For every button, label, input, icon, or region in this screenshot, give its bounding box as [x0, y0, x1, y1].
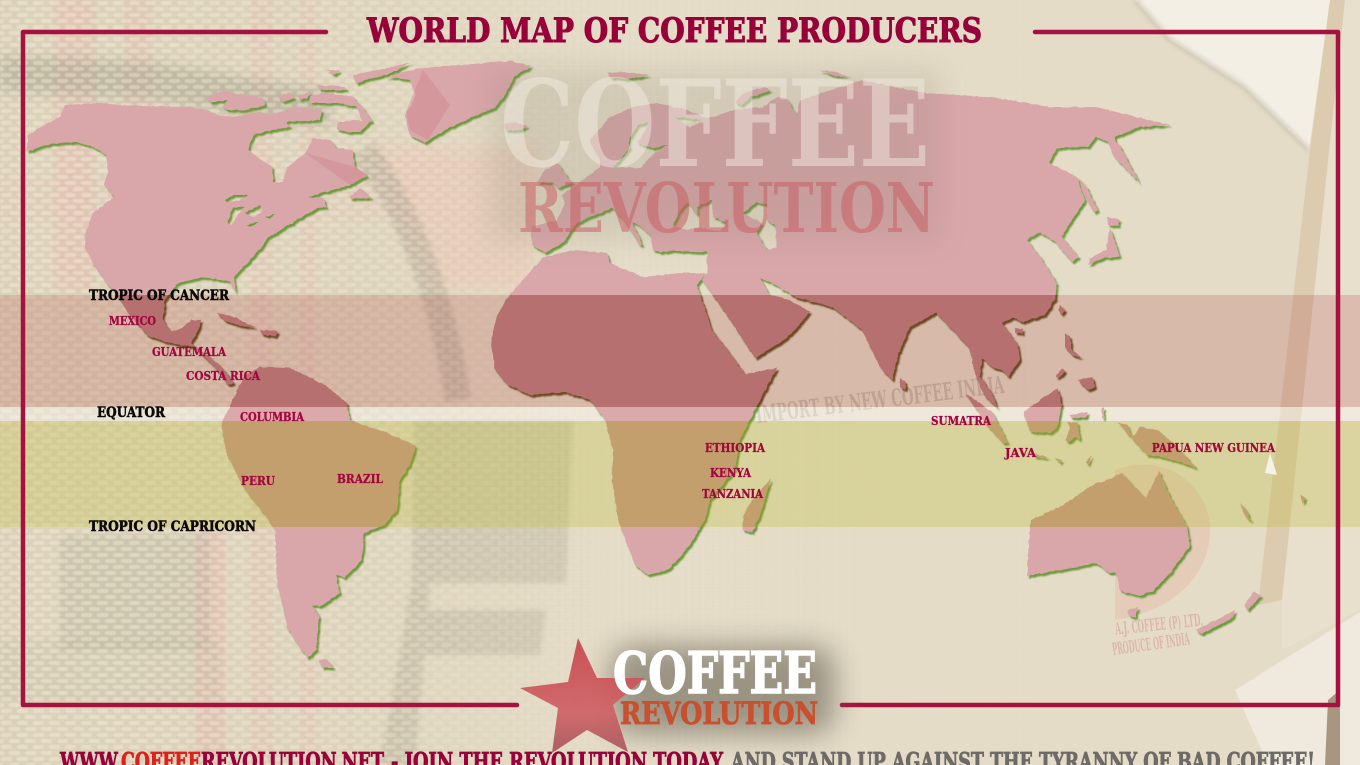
dark arc stroke — [364, 150, 458, 400]
island: Novaya Zemlya — [735, 87, 770, 105]
title: WORLD MAP OF COFFEE PRODUCERS — [366, 11, 982, 51]
island: Sulawesi — [1065, 408, 1104, 443]
island: Iceland — [503, 122, 528, 131]
latitude labels — [89, 288, 256, 535]
islands: Canadian Arctic — [278, 70, 347, 102]
label: Peru: PERU — [241, 474, 275, 488]
watermark logo — [490, 54, 940, 249]
island: Greenland — [386, 61, 532, 143]
island: Philippines — [1055, 333, 1095, 390]
producer country labels — [109, 314, 1276, 501]
continent: Eurasia — [531, 80, 1170, 408]
label: Papua New Guinea: PAPUA NEW GUINEA — [1152, 441, 1276, 455]
label: Ethiopia: ETHIOPIA — [705, 441, 766, 455]
island: Ellesmere — [353, 62, 411, 84]
island: Sakhalin — [1079, 177, 1098, 213]
grey fold top left — [0, 55, 330, 128]
island: Baffin — [310, 92, 373, 123]
wood strip right — [1258, 0, 1345, 605]
island: Southampton — [337, 120, 370, 132]
sack logo ring — [1115, 465, 1210, 620]
label: Brazil: BRAZIL — [337, 472, 383, 486]
logo word: REVOLUTION: REVOLUTION — [620, 696, 818, 732]
continent: Australia — [1027, 471, 1190, 596]
label: Costa Rica: COSTA RICA — [186, 369, 261, 383]
background: burlap sack photo: PRODUCE OF INDIA — [1111, 629, 1191, 660]
sack stripes — [0, 0, 420, 765]
white corner bottom right — [1235, 612, 1360, 765]
logo shadow — [610, 645, 835, 735]
footer tagline — [59, 747, 1315, 765]
logo: Coffee Revolution — [520, 638, 835, 753]
stencilled letter shapes — [380, 421, 573, 765]
island: New Guinea — [1118, 422, 1197, 468]
peach stain — [364, 146, 540, 290]
island: Britain and Ireland — [537, 163, 573, 188]
island: Svalbard — [607, 72, 650, 79]
continent: Africa — [491, 250, 777, 575]
label: Guatemala: GUATEMALA — [152, 345, 227, 359]
islands: Melanesia — [1240, 495, 1306, 522]
island: Taiwan — [1058, 305, 1065, 315]
island: Severnaya Zemlya — [819, 70, 853, 78]
islands: Caribbean — [217, 313, 278, 336]
label: Mexico: MEXICO — [109, 314, 156, 328]
background: burlap sack photo: A.J. COFFEE (P) LTD. — [1114, 611, 1204, 640]
label: Tropic of Cancer: TROPIC OF CANCER — [89, 288, 229, 304]
map creases — [305, 70, 450, 185]
continent: South America — [221, 367, 416, 658]
icon: red star — [520, 638, 645, 753]
white wall top right — [1135, 0, 1330, 150]
island: Sumatra — [965, 393, 1008, 443]
label: Equator: EQUATOR — [97, 405, 165, 421]
island: Madagascar — [743, 478, 771, 533]
climate bands: tropic north, equator strip, tropic south — [0, 295, 1360, 527]
continent: North America — [27, 103, 368, 385]
logo word: COFFEE: COFFEE — [613, 640, 817, 707]
label: Tropic of Capricorn: TROPIC OF CAPRICORN — [89, 519, 256, 535]
icon: white marker near Papua New Guinea — [1265, 453, 1277, 475]
map coast shadow — [27, 61, 1306, 668]
island: Sri Lanka — [900, 378, 906, 390]
faded sack print: IMPORT BY NEW COFFEE INDIA — [754, 370, 1006, 429]
island: Japan — [1088, 217, 1120, 265]
label: Sumatra: SUMATRA — [931, 414, 992, 428]
label: Columbia: COLUMBIA — [240, 410, 305, 424]
watermark word: REVOLUTION: REVOLUTION — [518, 169, 935, 249]
label: Tanzania: TANZANIA — [702, 487, 764, 501]
island: Newfoundland — [350, 188, 372, 199]
island: Victoria — [207, 90, 265, 110]
island: Java — [1033, 453, 1050, 458]
watermark word: COFFEE: COFFEE — [500, 54, 930, 195]
watermark shadow — [490, 70, 940, 240]
island: Tierra del Fuego — [319, 659, 334, 668]
islands: New Zealand — [1196, 591, 1261, 634]
islands: Lesser Sunda — [1055, 455, 1092, 465]
island: Tasmania — [1127, 607, 1138, 617]
island: Borneo — [1023, 388, 1062, 433]
label: Kenya: KENYA — [710, 466, 752, 480]
island: Hainan — [1015, 328, 1023, 334]
label: Java: JAVA — [1004, 446, 1037, 460]
world map land masses — [27, 61, 1306, 668]
